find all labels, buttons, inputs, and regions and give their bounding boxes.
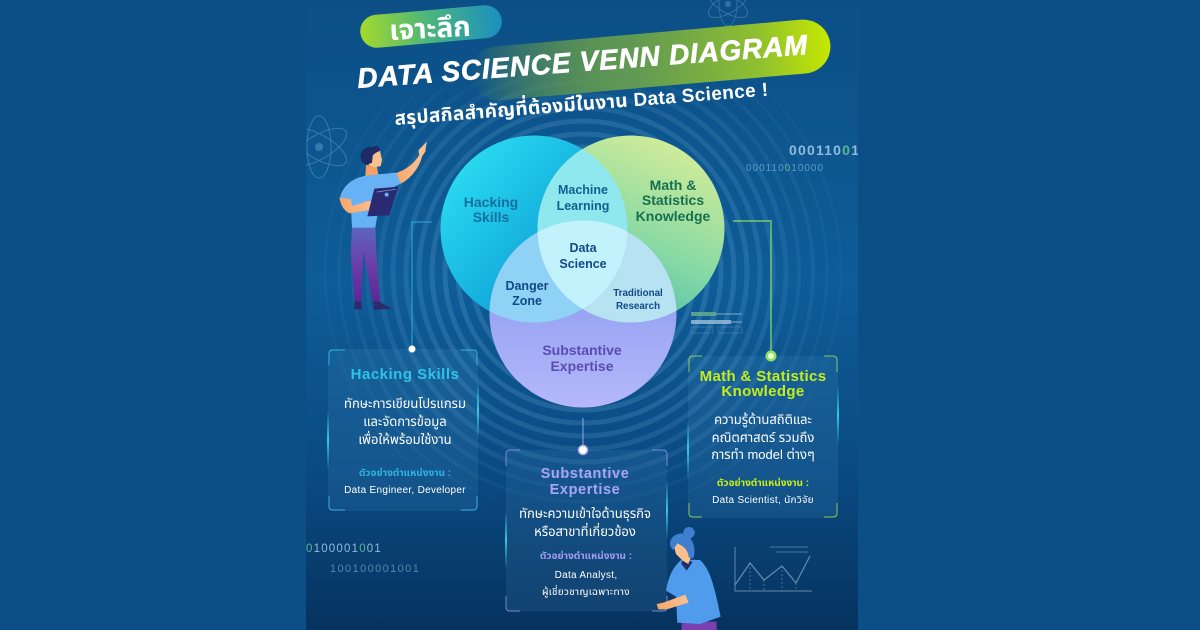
woman pants [682,622,717,630]
card body: ทักษะความเข้าใจด้านธุรกิจ [519,506,651,521]
binary text bottom left [306,544,418,572]
card: math and statistics [687,350,839,518]
label: substantive expertise: Expertise [550,358,614,374]
woman blouse [666,559,721,624]
man lower arm [339,197,377,213]
overlap: danger zone [490,232,582,322]
label: danger zone: Zone [512,294,542,308]
card body: หรือสาขาที่เกี่ยวข้อง [534,522,636,539]
card connector dot [408,346,416,352]
man neck [365,165,379,176]
icon: atom left [306,116,347,178]
label: math and statistics: Math & [650,177,696,193]
card heading: Expertise [550,482,620,498]
woman hair bun [683,527,695,538]
circle: substantive expertise [490,220,676,408]
man legs [351,227,380,302]
woman collar [681,559,693,571]
card heading: Substantive [541,466,629,482]
card example label: ตัวอย่างตำแหน่งงาน : [359,466,451,479]
man shirt [340,173,401,228]
card example roles: ผู้เชี่ยวชาญเฉพาะทาง [542,584,630,598]
line chart decoration [735,547,812,591]
label: math and statistics: Knowledge [636,208,711,224]
card example roles: Data Analyst, [555,570,617,581]
card corners [689,356,837,517]
label: danger zone: Danger [505,279,549,293]
concentric ripple rings [351,93,814,477]
illustration: woman at laptop [657,527,721,630]
overlap: traditional research [538,220,676,322]
binary text top right: 000110010000 [746,163,824,174]
label: math and statistics: Statistics [642,192,704,208]
card body: ทักษะการเขียนโปรแกรม [344,396,466,411]
subtitle: สรุปสกิลสำคัญที่ต้องมีในงาน Data Science ! [393,76,769,130]
card corners [329,350,477,510]
title pill: เจาะลึก: เจาะลึก [388,11,471,46]
card connector dot [766,350,776,362]
card body: คณิตศาสตร์ รวมถึง [712,430,814,445]
venn diagram [440,136,724,408]
connector lines [412,221,771,450]
card heading: Math & Statistics [700,368,826,385]
label: machine learning: Learning [557,199,609,213]
card example roles: Data Engineer, Developer [344,485,466,496]
card example label: ตัวอย่างตำแหน่งงาน : [540,549,632,562]
man raised arm [395,155,422,184]
card connector dot [578,446,588,454]
label: hacking skills: Skills [473,209,509,225]
title banner: DATA SCIENCE VENN DIAGRAM [356,29,809,94]
label: data science: Data [569,241,598,255]
circle: hacking skills [440,136,628,322]
woman face [673,542,692,564]
man hair [361,146,380,165]
card example label: ตัวอย่างตำแหน่งงาน : [717,476,809,489]
binary text bottom left: 0100001001 [306,543,382,555]
woman hair [670,533,695,558]
infographic background panel [306,0,858,630]
label: traditional research: Research [616,301,660,312]
card body: และจัดการข้อมูล [363,414,447,429]
woman arm [657,595,689,609]
overlap: data science [538,220,628,309]
binary text top right [746,146,858,171]
label: substantive expertise: Substantive [542,342,622,358]
card edge glows [327,410,329,470]
card: substantive expertise [505,446,668,611]
card heading: Hacking Skills [351,366,459,383]
man shoes [354,302,392,310]
card edge glows [505,510,507,570]
illustration: man with tablet [339,142,427,310]
card edge glows [687,420,689,480]
circle: math and statistics [538,136,724,322]
label: machine learning: Machine [558,183,608,197]
label: traditional research: Traditional [613,288,663,299]
binary text top right: 00011001 [789,142,860,158]
card body: การทำ model ต่างๆ [711,447,815,462]
overlap: machine learning [538,149,628,232]
card corners [506,450,667,611]
card body: ความรู้ด้านสถิติและ [714,412,812,427]
title pill: เจาะลึก [359,4,503,49]
label: data science: Science [559,257,607,271]
card example roles: Data Scientist, นักวิจัย [712,494,814,506]
card heading: Knowledge [721,383,805,400]
card body: เพื่อให้พร้อมใช้งาน [358,430,452,447]
icon: atom top [704,0,752,26]
small data bars decoration [691,312,742,333]
man tablet [367,187,398,216]
label: hacking skills: Hacking [464,194,518,210]
card: hacking skills [327,346,479,511]
man face [369,151,382,167]
binary text bottom left: 100100001001 [330,563,420,575]
